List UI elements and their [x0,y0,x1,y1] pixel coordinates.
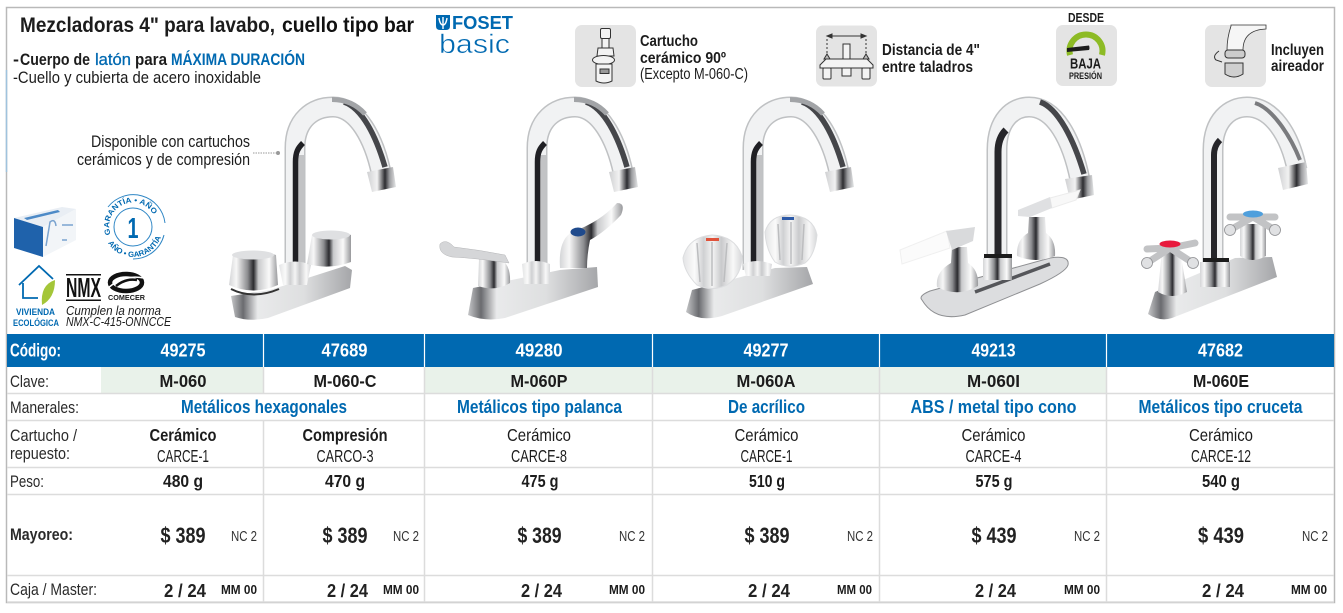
row: peso: 475 g [522,471,558,491]
row: manerales: Metálicos tipo cruceta [1138,397,1303,417]
badge: 1 year warranty: AÑO • GARANTÍA [108,237,161,257]
row: cartucho: CARCE-1 [740,446,792,466]
row: clave [10,371,1249,391]
row: mayoreo prices: NC 2 [619,528,645,545]
row: caja master: 2 / 24 [521,581,562,601]
table background: clave highlight [101,367,1106,393]
row: caja master: MM 00 [1064,582,1100,597]
feature text block: para [135,50,167,69]
icon: vivienda ecologica: VIVIENDA [16,307,55,318]
row: peso: 540 g [1202,471,1240,491]
row: cartucho: CARCO-3 [316,446,374,466]
row: cartucho: Cerámico [1189,425,1253,445]
row: caja master: MM 00 [221,582,257,597]
logo: Foset basic: basic [439,29,510,59]
row: manerales: Manerales: [10,398,79,417]
row: mayoreo prices: NC 2 [1074,528,1100,545]
norm text [66,303,171,329]
row: caja master: 2 / 24 [748,581,790,601]
badge: 1 year warranty [104,194,166,260]
row: cartucho: Cerámico [734,425,798,445]
row: manerales: Metálicos hexagonales [181,397,347,417]
faucet: M-060 [229,100,396,320]
row: cartucho: Cerámico [962,425,1026,445]
row: cartucho: CARCE-4 [966,446,1022,466]
row: clave: M-060I [967,371,1020,391]
row: mayoreo prices: $ 439 [972,523,1016,548]
feature text block: Cuerpo de [20,50,90,69]
row: mayoreo prices: $ 389 [322,523,368,548]
feature: 4 inch distance: Distancia de 4" [882,42,980,59]
row: caja master: 2 / 24 [327,581,368,601]
table header row: 47689 [322,340,368,360]
row: clave: M-060A [736,371,796,391]
row: caja master: MM 00 [609,582,645,597]
row: peso: 470 g [325,471,365,491]
row: mayoreo prices: NC 2 [231,528,257,545]
row: manerales [10,397,1303,417]
badge: 1 year warranty: 1 [128,213,138,245]
norm text: NMX-C-415-ONNCCE [66,314,171,329]
row: clave: M-060P [510,371,568,391]
logo: Foset basic [436,13,513,59]
row: mayoreo prices [10,523,1328,548]
row: peso [10,471,1240,491]
icon: Comecer: COMECER [108,293,146,302]
row: mayoreo prices: NC 2 [393,528,419,545]
row: cartucho: Cerámico [507,425,571,445]
row: caja master: Caja / Master: [10,580,97,599]
table header row: 49275 [160,340,206,360]
feature text block: MÁXIMA DURACIÓN [171,50,305,69]
feature text block [13,50,305,87]
faucet: M-060A [683,100,854,318]
row: cartucho: Cartucho / [10,426,77,445]
table header row: 49277 [744,340,788,360]
feature: 4 inch distance: entre taladros [882,59,973,76]
logo: Foset basic: FOSET [452,13,513,33]
row: peso: 575 g [976,471,1012,491]
faucet: M-060P [440,100,638,319]
row: cartucho: CARCE-1 [157,446,209,466]
row: cartucho: repuesto: [10,444,70,463]
row: peso: Peso: [10,472,44,491]
feature text block: -Cuello y cubierta de acero inoxidable [13,68,261,87]
table header row: Código: [10,340,61,360]
feature: aerator: aireador [1271,58,1324,75]
table grid [7,367,1334,602]
faucet: M-060I [900,102,1094,317]
row: cartucho: Cerámico [150,425,216,445]
table header row: 49213 [972,340,1016,360]
row: caja master: MM 00 [383,582,419,597]
row: clave: Clave: [10,372,49,391]
row: caja master: 2 / 24 [164,581,206,601]
title emphasis: cuello tipo bar [282,13,415,37]
row: mayoreo prices: $ 389 [744,523,790,548]
feature: ceramic cartridge [575,25,748,87]
badge: 1 year warranty: GARANTÍA • AÑO [104,197,157,235]
feature: ceramic cartridge: Cartucho [640,33,698,50]
feature: low pressure: DESDE [1068,10,1104,25]
feature: ceramic cartridge: (Excepto M-060-C) [640,66,748,83]
feature: ceramic cartridge: cerámico 90º [640,50,726,67]
row: clave: M-060 [160,371,207,391]
row: clave: M-060E [1193,371,1249,391]
table header row: 49280 [516,340,562,360]
norm text: Cumplen la norma [66,303,161,318]
row: cartucho: CARCE-8 [511,446,567,466]
row: caja master: MM 00 [837,582,872,597]
row: peso: 510 g [749,471,785,491]
row: caja master: 2 / 24 [1202,581,1244,601]
feature text block: latón [95,50,131,69]
feature: low pressure [1056,10,1117,86]
row: mayoreo prices: $ 389 [160,523,206,548]
row: cartucho: Compresión [302,425,388,445]
icon: Comecer [108,274,146,302]
callout: cartridges: cerámicos y de compresión [77,150,250,169]
icon: NMX: NMX [66,272,101,303]
row: peso: 480 g [163,471,203,491]
row: cartucho [10,425,1253,466]
feature: 4 inch distance [816,26,980,86]
feature: low pressure: PRESIÓN [1069,70,1102,82]
row: manerales: ABS / metal tipo cono [910,397,1077,417]
row: cartucho: CARCE-12 [1191,446,1251,466]
row: mayoreo prices: $ 439 [1198,523,1244,548]
row: caja master [10,580,1327,601]
icon: vivienda ecologica [13,266,59,329]
row: caja master: 2 / 24 [975,581,1016,601]
icon: NMX [66,272,101,303]
row: mayoreo prices: Mayoreo: [10,525,73,544]
row: manerales: De acrílico [728,397,805,417]
callout: cartridges [77,132,280,169]
table header row: 47682 [1198,340,1243,360]
feature: low pressure: BAJA [1070,56,1101,72]
feature: aerator: Incluyen [1271,42,1324,59]
row: manerales: Metálicos tipo palanca [457,397,623,417]
table header row [7,334,1334,367]
row: mayoreo prices: NC 2 [1302,528,1328,545]
icon: product box [14,207,76,257]
row: mayoreo prices: NC 2 [847,528,873,545]
feature text block: - [13,50,19,69]
faucet: M-060E [1142,103,1308,319]
row: caja master: MM 00 [1291,582,1327,597]
specification table [7,334,1334,602]
title: Mezcladoras 4" para lavabo, [20,13,275,37]
row: clave: M-060-C [314,371,377,391]
icon: vivienda ecologica: ECOLÓGICA [13,317,59,329]
feature: aerator [1205,25,1324,87]
row: mayoreo prices: $ 389 [518,523,562,548]
callout: cartridges: Disponible con cartuchos [91,132,250,151]
